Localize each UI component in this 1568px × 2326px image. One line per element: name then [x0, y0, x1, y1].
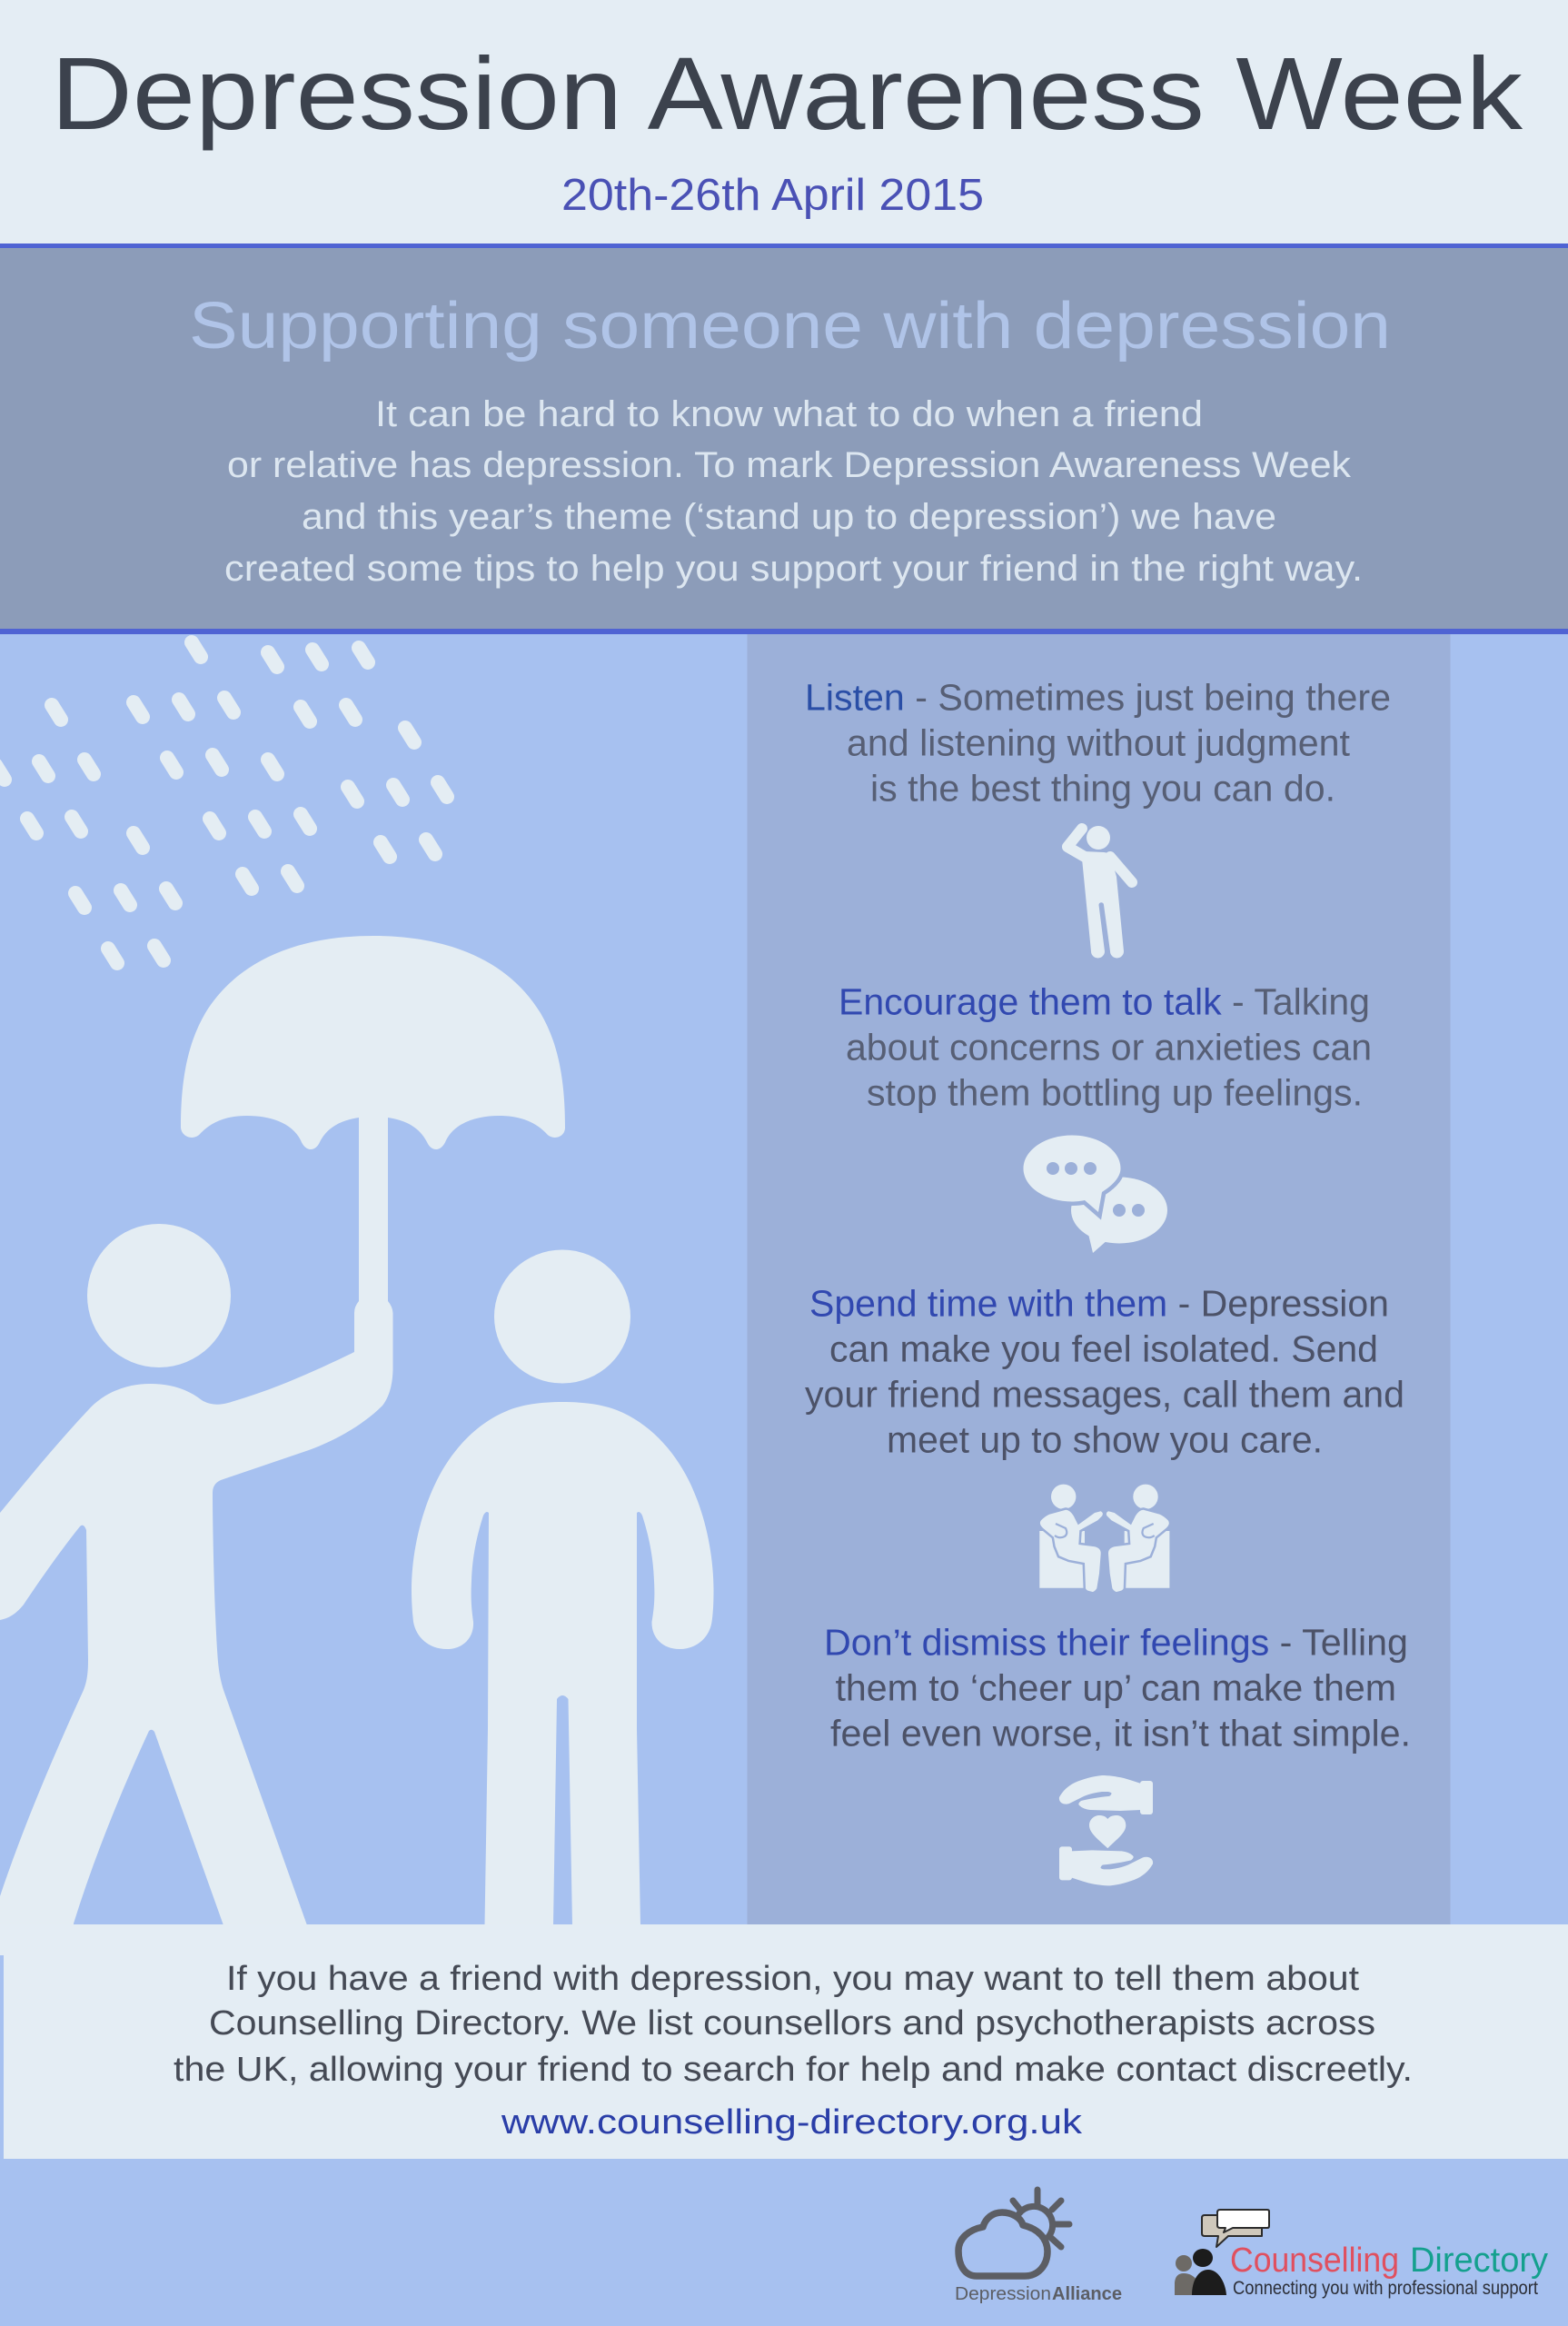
intro paragraph: and this year’s theme (‘stand up to depression’) we have: [302, 497, 1276, 537]
tip: encourage them to talk: Encourage them to talk - Talking: [839, 981, 1370, 1023]
logo wordmark: alliance: Alliance: [1052, 2284, 1122, 2304]
tip: listen: and listening without judgment: [847, 722, 1351, 764]
intro paragraph: It can be hard to know what to do when a friend: [375, 394, 1203, 434]
tip: spend time with them: meet up to show you care.: [887, 1419, 1323, 1461]
tip: listen: [805, 676, 1391, 810]
logo wordmark: depression: Depression: [955, 2284, 1051, 2304]
intro paragraph: or relative has depression. To mark Depression Awareness Week: [227, 445, 1352, 485]
intro paragraph: [224, 394, 1363, 589]
tip: don't dismiss their feelings: Don’t dismiss their feelings - Telling: [824, 1621, 1408, 1663]
footer paragraph: If you have a friend with depression, you may want to tell them about: [226, 1960, 1359, 1998]
icon: cloud and sun: [958, 2190, 1069, 2276]
intro paragraph: created some tips to help you support your friend in the right way.: [224, 549, 1363, 589]
logo wordmark second word: Directory: [1410, 2242, 1548, 2280]
icon: hands holding heart: [1059, 1775, 1153, 1885]
footer paragraph: Counselling Directory. We list counsellors and psychotherapists across: [209, 2004, 1375, 2043]
illustration: person holding umbrella: [0, 1224, 392, 1925]
tip: don't dismiss their feelings: [824, 1621, 1411, 1754]
illustration: person standing: [412, 1250, 714, 1925]
footer panel: counselling directory message: [0, 1924, 1568, 2159]
icon: speech bubbles: [1202, 2210, 1269, 2247]
illustration: umbrella: [181, 936, 565, 1313]
logo wordmark: Counselling: [1230, 2242, 1399, 2280]
intro heading: Supporting someone with depression: [189, 290, 1391, 363]
tip: spend time with them: your friend messages, call them and: [805, 1374, 1404, 1416]
tip: encourage them to talk: [839, 981, 1372, 1114]
tip: spend time with them: Spend time with them - Depression: [809, 1283, 1389, 1325]
logo: Depression Alliance: [955, 2190, 1122, 2304]
intro panel: supporting someone with depression: [0, 244, 1568, 634]
header panel: [0, 0, 1568, 244]
tip: don't dismiss their feelings: them to ‘cheer up’ can make them: [836, 1666, 1396, 1708]
icon: two people sitting: [1039, 1485, 1169, 1592]
icon: thinking person: [1067, 826, 1132, 958]
icon: two people: [1175, 2249, 1226, 2295]
illustration: rain drops: [0, 642, 447, 963]
logo: Counselling Directory: [1175, 2210, 1548, 2299]
tip: encourage them to talk: about concerns or anxieties can: [846, 1027, 1372, 1069]
tip: listen: is the best thing you can do.: [870, 768, 1335, 810]
tip: spend time with them: can make you feel isolated. Send: [829, 1328, 1378, 1370]
tip: spend time with them: [805, 1283, 1404, 1461]
footer paragraph: [174, 1960, 1413, 2089]
panel: tips: [747, 634, 1450, 1924]
tip: listen: Listen - Sometimes just being there: [805, 676, 1391, 718]
footer paragraph: the UK, allowing your friend to search for help and make contact discreetly.: [174, 2051, 1413, 2089]
tip: encourage them to talk: stop them bottling up feelings.: [867, 1072, 1363, 1114]
website link: www.counselling-directory.org.uk: [501, 2103, 1083, 2142]
date subtitle: 20th-26th April 2015: [561, 171, 984, 220]
icon: speech bubbles: [1023, 1136, 1167, 1253]
title: Depression Awareness Week: [51, 36, 1523, 151]
tip: don't dismiss their feelings: feel even worse, it isn’t that simple.: [830, 1712, 1411, 1754]
